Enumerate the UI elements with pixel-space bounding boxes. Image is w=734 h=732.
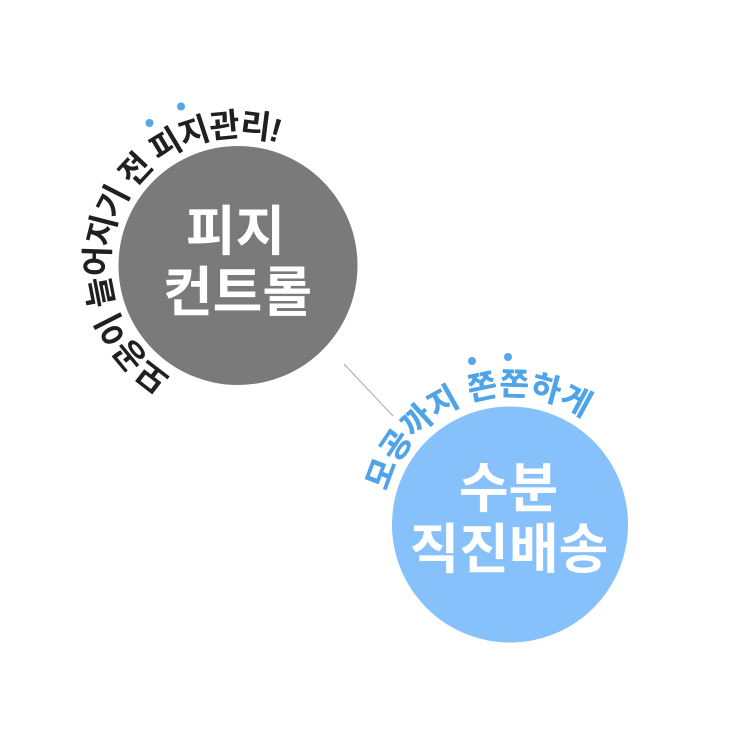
heading: sebum control: 피지: [186, 202, 285, 262]
heading: direct moisture delivery: 수분: [459, 459, 558, 519]
heading: direct moisture delivery: 직진배송: [410, 520, 608, 580]
panel: sebum control: [82, 102, 358, 394]
emphasis dots: sebum: [146, 102, 185, 127]
connector line: [344, 364, 393, 416]
curved caption: pore firmness: 모공까지 쫀쫀하게: [364, 369, 594, 490]
curved caption: sebum care: 모공이 늘어지기 전 피지관리!: [82, 108, 282, 394]
emphasis dots: firm: [468, 353, 512, 365]
gray circle: [118, 146, 358, 385]
panel: direct moisture delivery: [364, 353, 628, 642]
heading: sebum control: 컨트롤: [163, 263, 312, 323]
blue circle: [392, 406, 628, 642]
